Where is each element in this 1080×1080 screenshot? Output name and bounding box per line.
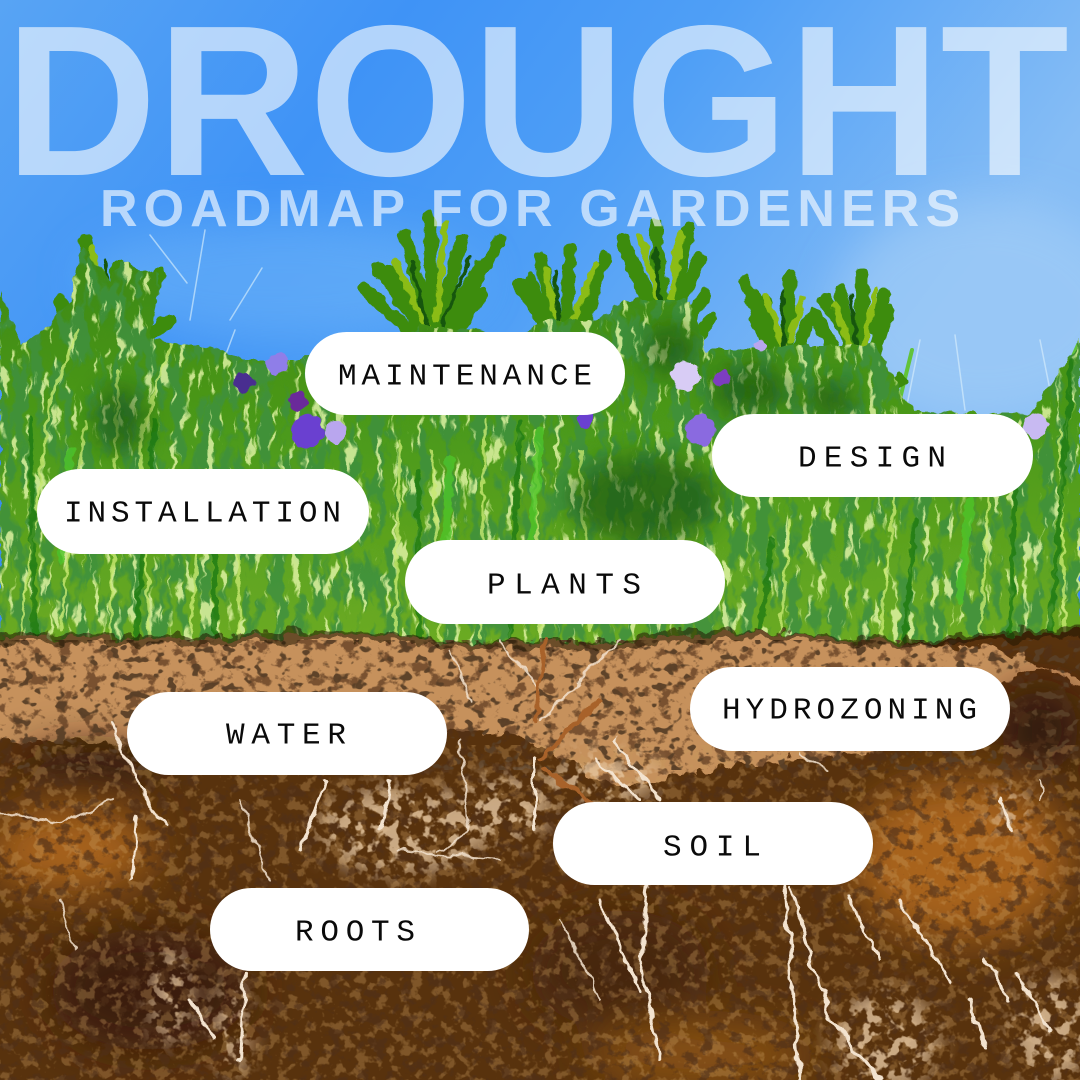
pill: ROOTS (210, 888, 529, 971)
foliage: grass mass (0, 220, 1080, 650)
pill: HYDROZONING: HYDROZONING (722, 694, 977, 728)
background: thin grass blades against sky (150, 230, 1078, 430)
pill: HYDROZONING (690, 667, 1010, 751)
soil cross-section (0, 626, 1080, 1080)
pill: INSTALLATION: INSTALLATION (64, 496, 341, 532)
pill: WATER (127, 692, 447, 775)
pill: ROOTS: ROOTS (295, 916, 415, 950)
pill: INSTALLATION (37, 469, 369, 554)
pill: DESIGN (712, 414, 1033, 497)
subtitle: ROADMAP FOR GARDENERS: ROADMAP FOR GARDENERS (100, 180, 960, 238)
pill: MAINTENANCE: MAINTENANCE (338, 360, 592, 394)
pill: WATER: WATER (226, 718, 346, 754)
foliage: shrub fronds (60, 218, 900, 400)
background: sky (0, 0, 1080, 440)
pill: MAINTENANCE (305, 332, 625, 415)
pill: PLANTS (405, 540, 725, 624)
pill: SOIL (553, 802, 873, 885)
pill: DESIGN: DESIGN (798, 442, 946, 476)
pill: SOIL: SOIL (663, 830, 761, 866)
plant roots (0, 640, 1050, 1080)
pill: PLANTS: PLANTS (487, 568, 641, 604)
flowers (234, 339, 1048, 449)
